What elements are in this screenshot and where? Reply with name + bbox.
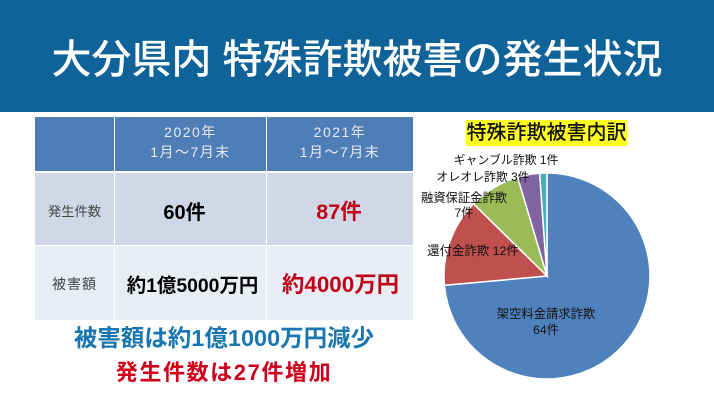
summary: damage decrease: 被害額は約1億1000万円減少: [74, 325, 374, 351]
label: ore-ore fraud: オレオレ詐欺 3件: [436, 170, 530, 184]
2020 damage value: 約1億5000万円: [127, 274, 258, 296]
row label: damage: [35, 246, 114, 320]
title banner: [0, 0, 714, 112]
2021 damage value: [267, 246, 413, 320]
header: 2020: 1月～7月末: [150, 144, 231, 160]
row label: incidents: [35, 173, 114, 245]
comparison table: [35, 117, 413, 320]
label: refund fraud: 還付金詐欺 12件: [427, 243, 519, 258]
2020 incidents value: [115, 173, 266, 245]
label: fictitious billing fraud: 64件: [533, 323, 559, 337]
slice: refund fraud: [444, 204, 547, 285]
label: loan guarantee fraud: 融資保証金詐欺: [421, 190, 507, 205]
slice: gambling fraud: [540, 173, 547, 276]
2021 incidents value: [267, 173, 413, 245]
slice: loan guarantee fraud: [474, 177, 547, 276]
label: fictitious billing fraud: [497, 306, 595, 337]
row label: damage: 被害額: [52, 276, 97, 292]
slice: fictitious billing fraud: [444, 173, 650, 379]
header: 2021: [267, 117, 413, 171]
header: 2020: [115, 117, 266, 171]
label: fictitious billing fraud: 架空料金請求詐欺: [497, 306, 595, 321]
title: 大分県内 特殊詐欺被害の発生状況: [51, 38, 663, 82]
2021 damage value: 約4000万円: [282, 272, 399, 297]
slice: ore-ore fraud: [518, 173, 547, 276]
pie chart title: 特殊詐欺被害内訳: [466, 122, 626, 144]
header: blank: [35, 117, 114, 171]
label: loan guarantee fraud: 7件: [454, 206, 474, 220]
label: gambling fraud: ギャンブル詐欺 1件: [454, 153, 558, 167]
2020 damage value: [115, 246, 266, 320]
header: 2021: 1月～7月末: [300, 144, 380, 160]
2021 incidents value: 87件: [316, 200, 362, 224]
2020 incidents value: 60件: [163, 202, 206, 224]
row label: incidents: 発生件数: [48, 204, 101, 219]
summary: incidents increase: 発生件数は27件増加: [116, 360, 332, 385]
label: loan guarantee fraud: [421, 190, 507, 220]
header: 2020: 2020年: [164, 124, 217, 140]
header: 2021: 2021年: [314, 124, 366, 140]
